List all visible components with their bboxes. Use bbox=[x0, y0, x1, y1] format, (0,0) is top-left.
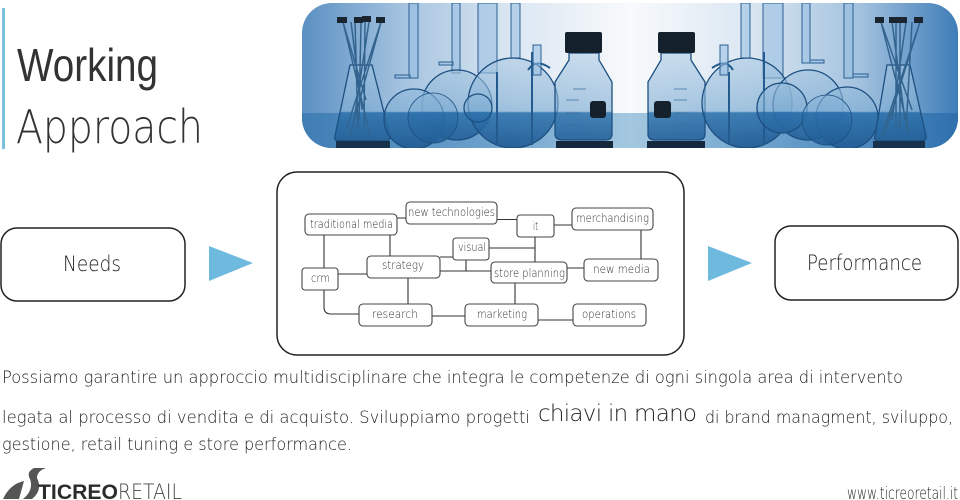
body text: gestione, retail tuning e store performance. bbox=[2, 435, 352, 454]
centre large flasks right bbox=[702, 3, 792, 148]
box: needs: Needs bbox=[63, 252, 121, 276]
tall round flasks left bbox=[384, 3, 492, 149]
node: store planning: store planning bbox=[494, 266, 565, 280]
right bottle bbox=[647, 32, 705, 148]
node: visual bbox=[453, 238, 489, 260]
body text: Possiamo garantire un approccio multidisciplinare che integra le competenze di ogni singola area di intervento bbox=[2, 368, 903, 387]
node: crm: crm bbox=[311, 271, 330, 285]
node: traditional media bbox=[305, 214, 397, 235]
tall round flasks right bbox=[757, 3, 878, 149]
box: performance: Performance bbox=[807, 251, 922, 275]
node: merchandising: merchandising bbox=[576, 211, 649, 225]
node: strategy: strategy bbox=[382, 258, 424, 272]
node: it: it bbox=[533, 219, 538, 233]
left bottle bbox=[555, 32, 613, 148]
body text bbox=[2, 368, 953, 454]
title bbox=[16, 39, 203, 154]
node: it bbox=[517, 215, 554, 237]
node: operations: operations bbox=[582, 307, 636, 321]
body text: chiavi in mano bbox=[538, 401, 697, 427]
node: operations bbox=[573, 304, 646, 326]
left erlenmeyer flask with rods bbox=[335, 16, 390, 148]
node: merchandising bbox=[572, 208, 653, 230]
title: Approach bbox=[16, 100, 203, 154]
accent bar bbox=[2, 8, 5, 149]
arrow: needs to diagram bbox=[209, 246, 253, 281]
node: new technologies: new technologies bbox=[408, 205, 495, 219]
panel: disciplines diagram bbox=[277, 172, 684, 355]
node: new technologies bbox=[406, 202, 497, 224]
connector lines bbox=[324, 218, 641, 320]
node: store planning bbox=[491, 262, 567, 283]
node: marketing bbox=[465, 304, 538, 326]
box: needs bbox=[1, 228, 185, 301]
node: new media: new media bbox=[593, 262, 650, 276]
arrow: diagram to performance bbox=[708, 246, 752, 281]
title: Working bbox=[17, 39, 158, 91]
node: strategy bbox=[367, 256, 440, 278]
node: research bbox=[359, 304, 432, 326]
laboratory glassware photo bbox=[302, 3, 958, 149]
node: marketing: marketing bbox=[477, 307, 527, 321]
box: performance bbox=[775, 226, 958, 300]
node: research: research bbox=[372, 307, 418, 321]
node: crm bbox=[302, 268, 338, 290]
logo: Ticreo Retail bbox=[3, 468, 182, 500]
body text: di brand managment, sviluppo, bbox=[705, 408, 953, 427]
node: visual: visual bbox=[458, 240, 486, 254]
node: new media bbox=[584, 259, 658, 281]
right erlenmeyer flask with rods bbox=[873, 17, 926, 148]
body text: legata al processo di vendita e di acquisto. Sviluppiamo progetti bbox=[2, 408, 530, 427]
centre large flasks left bbox=[464, 3, 558, 148]
node: traditional media: traditional media bbox=[310, 217, 393, 231]
